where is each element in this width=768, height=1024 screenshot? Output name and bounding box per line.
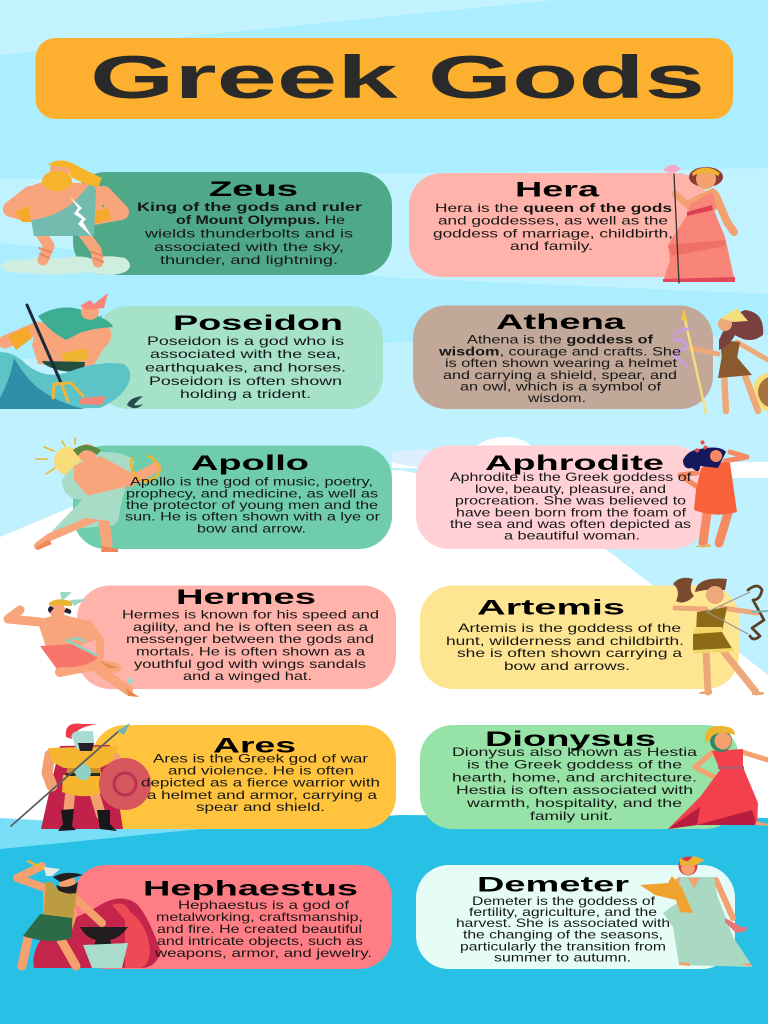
heading: Poseidon: Poseidon <box>173 312 343 335</box>
text: Artemis description: bow and arrows. <box>504 659 630 673</box>
heading: Dionysus: Dionysus <box>485 728 656 751</box>
text: Artemis description: hunt, wilderness and childbirth. <box>446 634 684 648</box>
heading: Artemis: Artemis <box>477 596 625 620</box>
icon: Aphrodite figure <box>680 440 747 547</box>
text: Ares description: spear and shield. <box>196 800 325 814</box>
text: Demeter description <box>456 894 670 964</box>
text: Dionysus description: Hestia is often associated with <box>456 783 693 797</box>
heading: Aphrodite: Aphrodite <box>485 452 664 475</box>
text: Hera description: and family. <box>510 239 593 253</box>
text: Apollo description: sun. He is often shown with a lye or <box>125 510 380 524</box>
icon: Apollo figure <box>35 438 160 552</box>
text: Demeter description: particularly the transition from <box>460 940 666 954</box>
text: Dionysus description: is the Greek goddess of the <box>467 758 683 772</box>
panel: Poseidon <box>0 293 383 409</box>
heading: Hera: Hera <box>515 178 600 202</box>
heading: Athena: Athena <box>496 311 626 334</box>
text: Poseidon description: Poseidon is often shown <box>149 374 342 388</box>
text: Apollo description <box>125 474 380 536</box>
text: Apollo description: the protector of young men and the <box>126 498 379 512</box>
text: Dionysus description: family unit. <box>530 809 613 823</box>
text: Hermes description: messenger between the gods and <box>126 632 374 646</box>
heading: Demeter: Demeter <box>477 874 629 896</box>
text: Hephaestus description: metalworking, craftsmanship, <box>156 910 363 924</box>
panel: Hephaestus <box>17 861 392 969</box>
text: Athena description: wisdom. <box>527 391 586 405</box>
panel: Demeter <box>416 856 753 969</box>
text: Artemis description <box>446 621 684 673</box>
text: Athena description <box>438 332 682 405</box>
text: Hephaestus description <box>154 898 372 960</box>
text: Artemis description: she is often shown carrying a <box>457 646 683 660</box>
panel: Ares <box>11 723 396 831</box>
text: Demeter description: fertility, agriculture, and the <box>469 905 658 919</box>
panel: Zeus <box>0 160 392 275</box>
text: Hermes description: and a winged hat. <box>183 669 312 683</box>
text: Ares description <box>141 752 380 814</box>
icon: Poseidon figure <box>0 293 143 409</box>
text: Athena description: wisdom , courage and crafts. She <box>438 344 682 358</box>
text: Zeus description: associated with the sky, <box>154 240 344 254</box>
panel: Aphrodite <box>416 440 747 549</box>
text: Zeus description: wields thunderbolts and is <box>143 226 353 240</box>
text: Hermes description <box>122 608 379 683</box>
icon: Artemis figure <box>673 578 767 695</box>
text: Poseidon description: earthquakes, and horses. <box>145 360 346 374</box>
title: Greek Gods <box>90 44 705 111</box>
heading: Zeus: Zeus <box>209 178 298 201</box>
icon: Dionysus figure <box>668 726 768 829</box>
text: Aphrodite description: the sea and was often depicted as <box>450 517 691 531</box>
text: Poseidon description <box>145 334 346 401</box>
text: Athena description: an owl, which is a symbol of <box>460 380 662 394</box>
text: Dionysus description <box>452 745 698 823</box>
text: Zeus description <box>137 200 363 267</box>
panel: Dionysus <box>420 725 768 829</box>
text: Dionysus description: warmth, hospitality, and the <box>465 796 683 810</box>
text: Apollo description: bow and arrow. <box>197 522 306 536</box>
text: Demeter description: the changing of the seasons, <box>463 928 663 942</box>
heading: Ares: Ares <box>213 734 296 758</box>
text: Athena description: Athena is the goddess of <box>467 332 653 346</box>
text: Poseidon description: associated with the sea, <box>150 347 341 361</box>
icon: Ares figure <box>11 723 151 831</box>
heading: Hephaestus: Hephaestus <box>143 878 358 900</box>
text: Hera description: goddess of marriage, childbirth, <box>433 226 673 240</box>
text: Hera description <box>433 201 673 253</box>
text: Zeus description: King of the gods and ruler <box>137 200 363 214</box>
text: Aphrodite description <box>450 470 692 542</box>
text: Aphrodite description: procreation. She was believed to <box>455 494 687 508</box>
text: Apollo description: prophecy, and medicine, as well as <box>126 486 378 500</box>
text: Ares description: depicted as a fierce warrior with <box>141 776 380 790</box>
text: Ares description: Ares is the Greek god of war <box>153 752 368 766</box>
text: Hephaestus description: Hephaestus is a god of <box>178 898 350 912</box>
text: Hephaestus description: and intricate objects, such as <box>157 934 363 948</box>
heading: Apollo: Apollo <box>191 452 309 475</box>
text: Dionysus description: Dionysus also known as Hestia <box>452 745 698 759</box>
panel: Hera <box>409 165 735 283</box>
text: Hera description: Hera is the queen of the gods <box>435 201 673 215</box>
icon: Hermes figure <box>8 592 139 697</box>
text: Artemis description: Artemis is the goddess of the <box>458 621 682 635</box>
text: Athena description: is often shown wearing a helmet <box>445 356 678 370</box>
text: Zeus description: thunder, and lightning. <box>160 253 338 267</box>
text: Poseidon description: holding a trident. <box>180 387 311 401</box>
icon: Zeus figure <box>0 160 130 275</box>
text: Dionysus description: hearth, home, and architecture. <box>452 770 697 784</box>
text: Ares description: and violence. He is often <box>168 764 354 778</box>
icon: Hephaestus figure <box>17 861 160 968</box>
text: Hermes description: mortals. He is often shown as a <box>136 644 366 658</box>
text: Poseidon description: Poseidon is a god who is <box>147 334 344 348</box>
text: Aphrodite description: love, beauty, pleasure, and <box>475 482 666 496</box>
panel: Hermes <box>8 586 396 697</box>
text: Aphrodite description: have been born from the foam of <box>456 506 687 520</box>
panel: Apollo <box>35 438 392 552</box>
text: Ares description: a helmet and armor, carrying a <box>147 788 378 802</box>
text: Hermes description: Hermes is known for his speed and <box>122 608 379 622</box>
text: Hermes description: youthful god with wings sandals <box>134 657 366 671</box>
text: Hera description: and goddesses, as well as the <box>438 214 669 228</box>
heading: Hermes: Hermes <box>176 586 316 609</box>
text: Demeter description: Demeter is the goddess of <box>472 894 656 908</box>
icon: Hera figure <box>663 165 735 283</box>
panel: Athena <box>413 306 768 413</box>
text: Hephaestus description: and fire. He created beautiful <box>157 922 362 936</box>
icon: Athena figure <box>674 308 768 413</box>
text: Athena description: and carrying a shield, spear, and <box>443 368 677 382</box>
text: Demeter description: summer to autumn. <box>494 950 631 964</box>
text: Demeter description: harvest. She is associated with <box>456 916 670 930</box>
text: Hephaestus description: weapons, armor, and jewelry. <box>154 946 372 960</box>
panel: Artemis <box>420 578 767 695</box>
icon: Demeter figure <box>640 856 753 967</box>
text: Zeus description: of Mount Olympus. He <box>176 213 346 227</box>
text: Hermes description: agility, and he is often seen as a <box>133 620 369 634</box>
text: Aphrodite description: Aphrodite is the Greek goddess of <box>450 470 692 484</box>
text: Aphrodite description: a beautiful woman. <box>504 528 640 542</box>
title banner <box>36 38 733 119</box>
text: Apollo description: Apollo is the god of music, poetry, <box>130 474 373 488</box>
